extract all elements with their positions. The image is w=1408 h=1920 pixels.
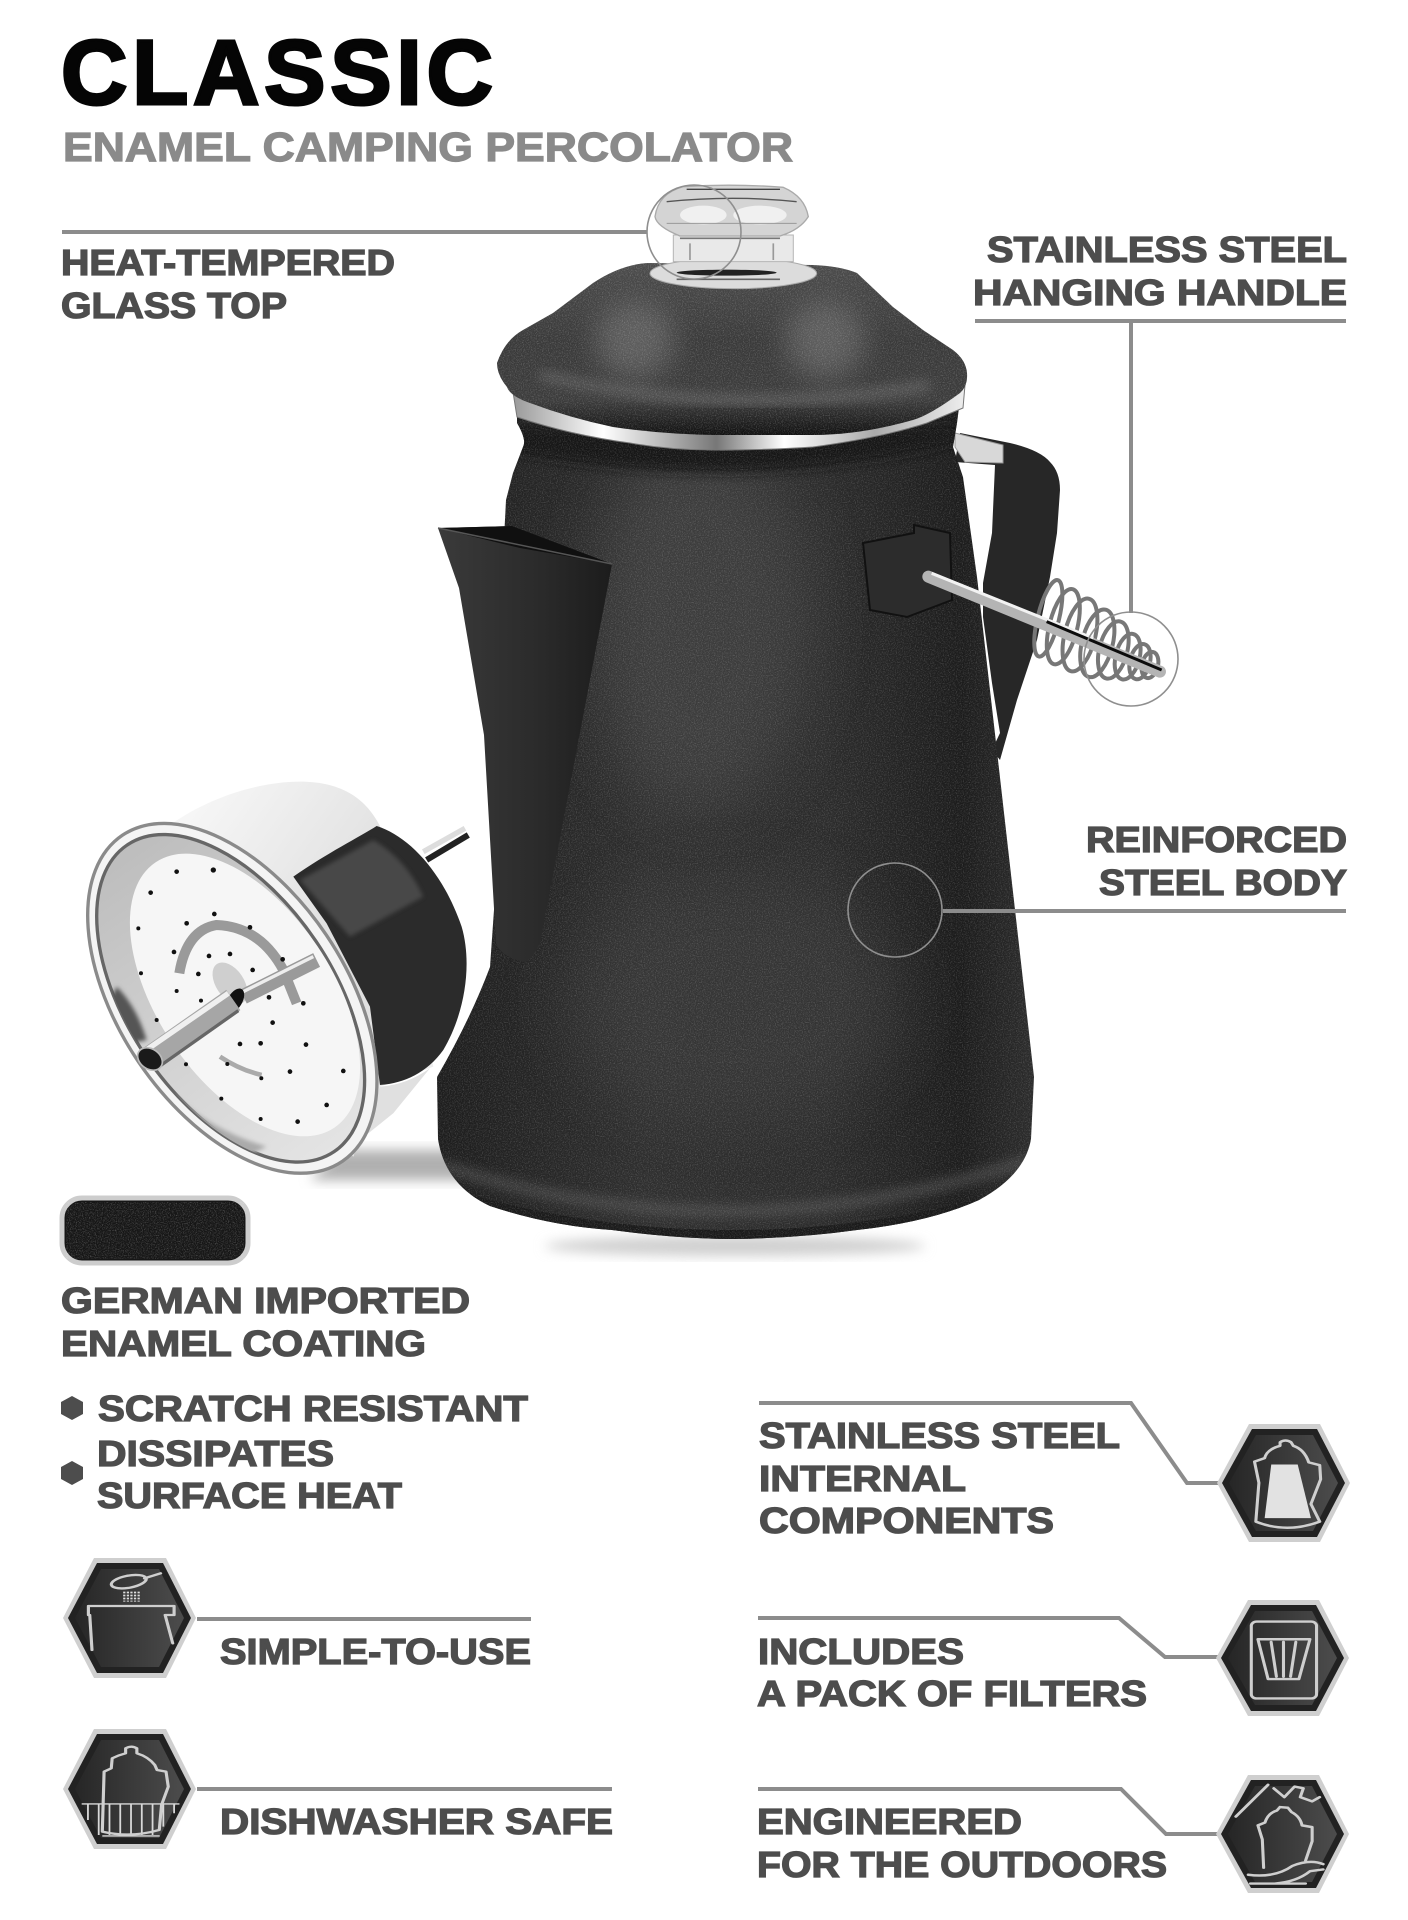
icon: pot in dish rack [63,1729,196,1849]
icon: filter pack [1216,1600,1349,1716]
feature: engineered for the outdoors [757,1775,1349,1893]
feature: engineered for the outdoors: ENGINEERED [757,1801,1022,1842]
feature: stainless steel internal components: COMPONENTS [759,1500,1054,1541]
subtitle: ENAMEL CAMPING PERCOLATOR [63,124,793,170]
icon: pot with mountains [1216,1775,1349,1893]
bullet list: coating benefits: SCRATCH RESISTANT [98,1388,528,1429]
basket stem [427,835,468,860]
callout: reinforced steel body: REINFORCED [1086,819,1347,860]
text: german imported enamel coating: GERMAN IMPORTED [61,1280,470,1321]
title: CLASSIC [61,22,493,124]
text: german imported enamel coating: ENAMEL COATING [61,1323,426,1364]
callout: heat-tempered glass top: GLASS TOP [61,285,287,326]
basket cast shadow [310,1150,475,1180]
callout: reinforced steel body: STEEL BODY [1099,862,1347,903]
callout: heat-tempered glass top [61,185,741,326]
product photo: percolator pot [430,185,1162,1256]
feature: simple to use [63,1558,531,1678]
icon: pan over table [63,1558,196,1678]
feature: dishwasher safe: DISHWASHER SAFE [220,1801,613,1842]
spout [438,526,612,962]
spring wire grip [928,573,1162,682]
callout: heat-tempered glass top: HEAT-TEMPERED [61,242,395,283]
basket holes [136,867,346,1124]
lid and chrome rim [490,255,980,450]
bullet list: coating benefits [61,1388,528,1516]
callout: stainless steel hanging handle: HANGING HANDLE [973,272,1347,313]
feature: includes a pack of filters: INCLUDES [758,1631,964,1672]
feature: stainless steel internal components: INTERNAL [759,1458,966,1499]
feature: stainless steel internal components [759,1403,1350,1542]
basket cup [170,782,433,1157]
icon: pot with internals [1217,1424,1350,1542]
product photo: percolator basket [86,782,470,1175]
basket rim and plate [28,772,436,1225]
pot body [430,400,1040,1250]
feature: engineered for the outdoors: FOR THE OUTDOORS [757,1844,1167,1885]
callout: reinforced steel body [848,819,1347,957]
basket centre tube [243,960,317,997]
feature: includes a pack of filters [757,1600,1349,1716]
feature: stainless steel internal components: STAINLESS STEEL [759,1415,1120,1456]
feature: dishwasher safe [63,1729,613,1849]
bullet list: coating benefits: DISSIPATES [97,1433,334,1474]
feature: includes a pack of filters: A PACK OF FILTERS [757,1673,1147,1714]
bullet list: coating benefits: SURFACE HEAT [97,1475,402,1516]
ground shadow [545,1236,925,1256]
callout: stainless steel hanging handle: STAINLESS STEEL [987,229,1347,270]
text: german imported enamel coating [61,1280,470,1364]
glass knob [650,185,817,289]
callout: stainless steel hanging handle [973,229,1347,706]
feature: simple to use: SIMPLE-TO-USE [220,1631,531,1672]
enamel coating swatch [62,1198,248,1263]
handle bracket [863,525,952,617]
handle [955,433,1060,760]
